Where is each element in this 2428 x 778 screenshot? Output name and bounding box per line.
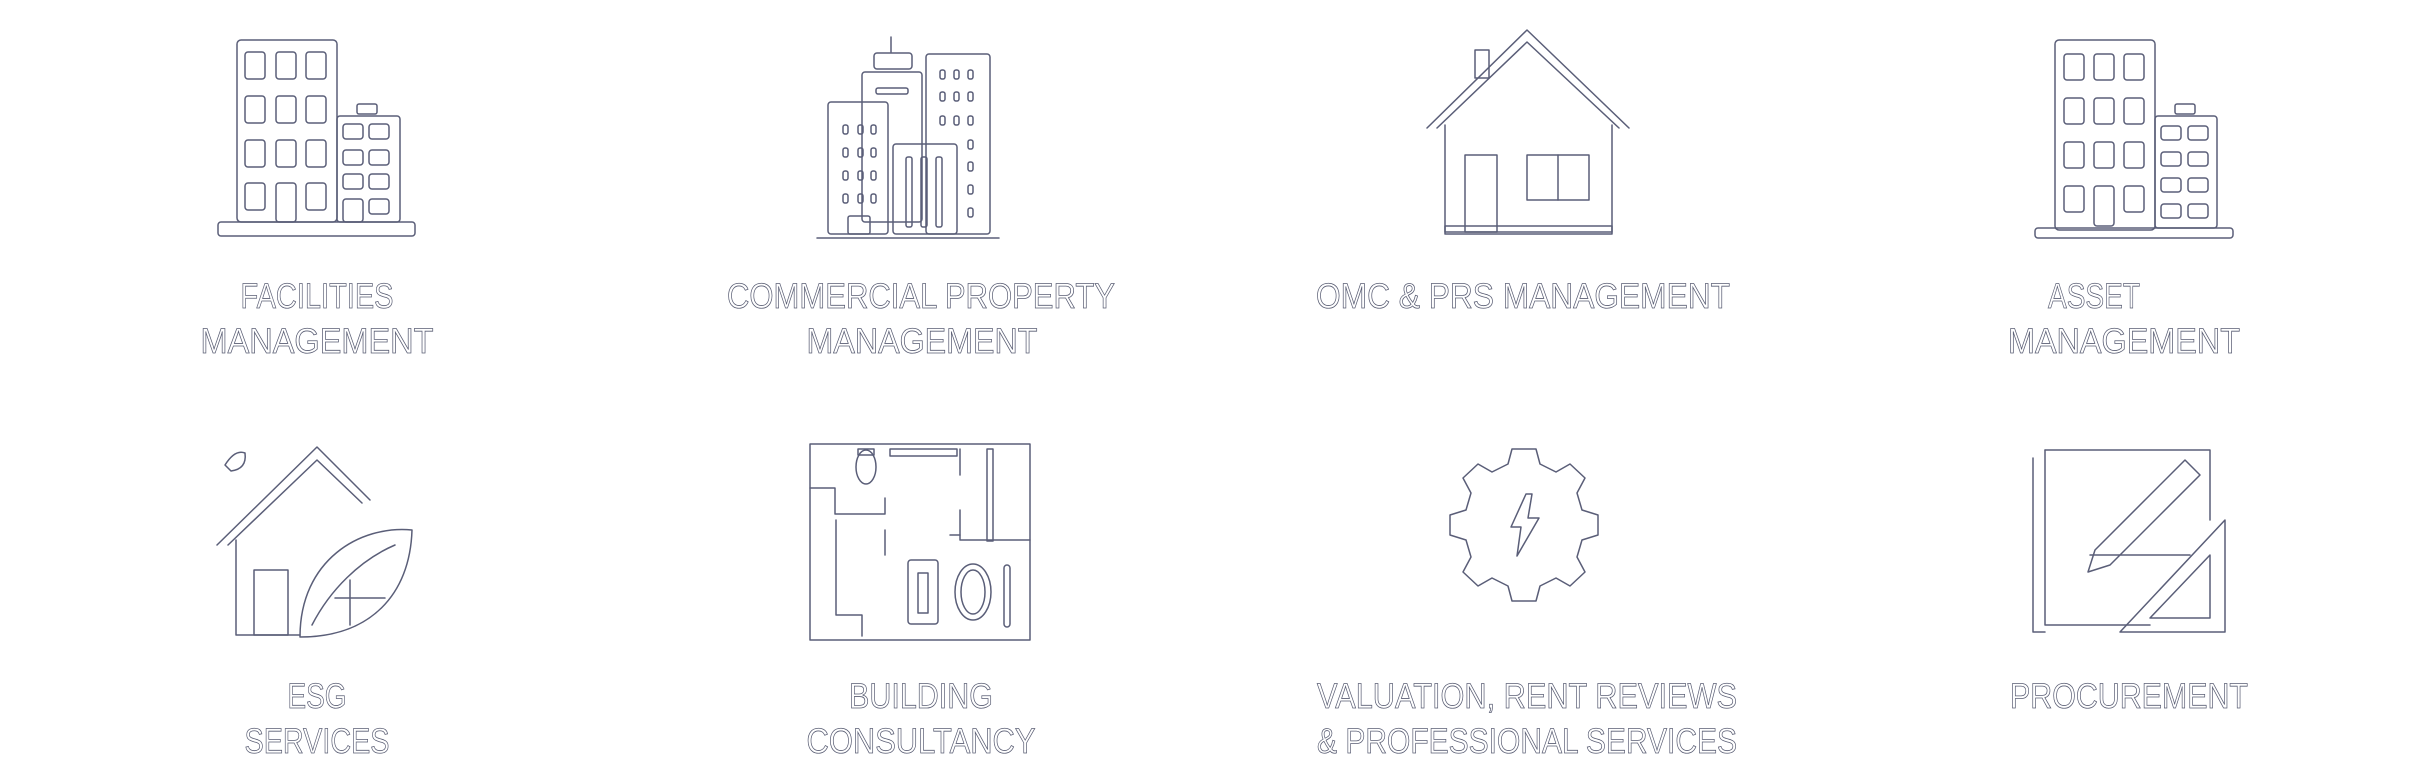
icon: facilities building [218, 40, 415, 236]
heading: valuation, rent reviews & professional services: VALUATION, RENT REVIEWS [1317, 677, 1737, 716]
icon: gear with lightning [1450, 449, 1598, 601]
icon: house [1427, 30, 1629, 234]
heading: esg services: ESG [288, 677, 346, 716]
heading: procurement: PROCUREMENT [2010, 677, 2248, 716]
heading: building consultancy: CONSULTANCY [806, 722, 1036, 761]
icon: esg house with leaf [217, 447, 412, 637]
heading: valuation, rent reviews & professional services [1317, 677, 1737, 761]
heading: facilities management: FACILITIES [240, 277, 394, 316]
heading: building consultancy [806, 677, 1036, 761]
heading: omc & prs management: OMC & PRS MANAGEMENT [1316, 277, 1730, 316]
heading: commercial property management: COMMERCIAL PROPERTY [727, 277, 1115, 316]
heading: valuation, rent reviews & professional services: & PROFESSIONAL SERVICES [1317, 722, 1737, 761]
heading: esg services: SERVICES [244, 722, 390, 761]
heading: esg services [244, 677, 390, 761]
icon: floor plan [810, 444, 1030, 640]
heading: asset management [2008, 277, 2240, 361]
icon: commercial buildings [817, 37, 999, 238]
heading: commercial property management [727, 277, 1115, 361]
heading: asset management: ASSET [2048, 277, 2140, 316]
icon: asset building [2035, 40, 2233, 238]
heading: facilities management: MANAGEMENT [200, 322, 434, 361]
icon: plan with pencil and set square [2033, 450, 2225, 632]
heading: building consultancy: BUILDING [849, 677, 993, 716]
heading: commercial property management: MANAGEMENT [806, 322, 1038, 361]
heading: facilities management [200, 277, 434, 361]
heading: asset management: MANAGEMENT [2008, 322, 2240, 361]
